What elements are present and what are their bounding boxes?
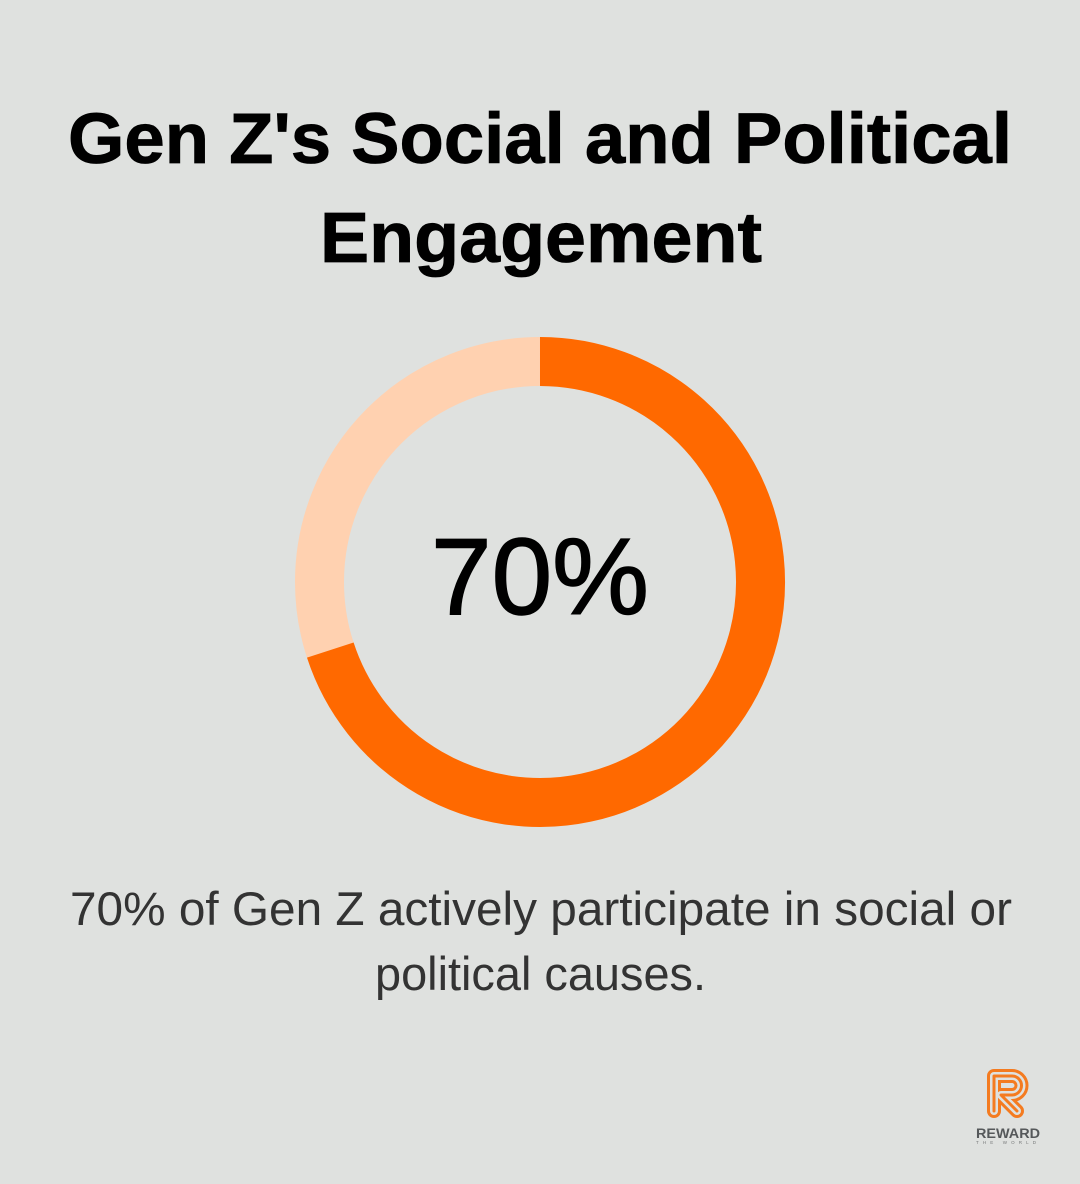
description text: political causes.: [375, 947, 706, 1000]
highlighted 70% segment: [330, 362, 761, 802]
title: Engagement: [320, 199, 762, 278]
center value: 70%: [431, 516, 649, 638]
title: [68, 100, 1012, 278]
logo tagline: THE WORLD: [976, 1140, 1037, 1145]
title: Gen Z's Social and Political: [68, 100, 1012, 179]
logo: Reward the World: [976, 1076, 1040, 1145]
icon: R mark: [994, 1076, 1022, 1111]
description text: 70% of Gen Z actively participate in social or: [70, 882, 1012, 935]
donut chart: 70%: [320, 362, 761, 802]
logo wordmark: REWARD: [976, 1126, 1040, 1141]
remaining 30% segment: [320, 362, 760, 802]
description text: [70, 882, 1012, 1000]
